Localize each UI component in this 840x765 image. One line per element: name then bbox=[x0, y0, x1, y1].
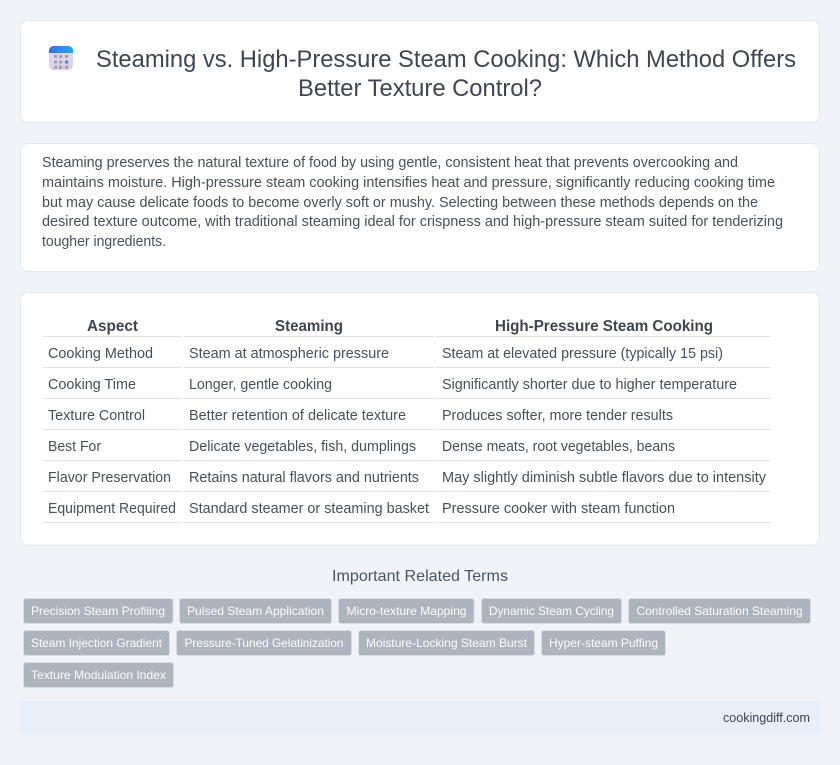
text block: intro: Steaming preserves the natural texture of food by using gentle, consistent heat that prevents overcooking and bbox=[42, 155, 738, 171]
text block: intro: but may cause delicate foods to become overly soft or mushy. Selecting between these methods depends on the bbox=[42, 195, 758, 211]
row: texture control: Better retention of delicate texture bbox=[189, 408, 406, 424]
panel: title header bbox=[20, 20, 820, 122]
panel: comparison table bbox=[20, 292, 820, 546]
title bbox=[96, 46, 796, 102]
footer source text: cookingdiff.com bbox=[723, 710, 810, 725]
tag bbox=[24, 598, 173, 624]
tag: Dynamic Steam Cycling bbox=[489, 604, 614, 618]
tag: Pulsed Steam Application bbox=[187, 604, 324, 618]
icon: calendar bbox=[49, 46, 73, 70]
tag: Micro-texture Mapping bbox=[346, 604, 466, 618]
tag bbox=[358, 630, 534, 656]
row: best for: Dense meats, root vegetables, beans bbox=[442, 439, 675, 455]
row: cooking time: Cooking Time bbox=[48, 377, 136, 393]
tag: Pressure-Tuned Gelatinization bbox=[184, 636, 344, 650]
tag bbox=[482, 598, 622, 624]
row: cooking time: Significantly shorter due to higher temperature bbox=[442, 377, 737, 393]
row: best for: Delicate vegetables, fish, dumplings bbox=[189, 439, 416, 455]
text block: intro bbox=[42, 155, 783, 250]
row: texture control bbox=[48, 408, 673, 424]
row: texture control: Produces softer, more tender results bbox=[442, 408, 673, 424]
panel: intro paragraph bbox=[20, 144, 820, 272]
tag: Precision Steam Profiling bbox=[31, 604, 165, 618]
panel: related term tags bbox=[24, 598, 810, 688]
row: flavor preservation: Flavor Preservation bbox=[48, 470, 171, 486]
table header row: Steaming bbox=[275, 318, 343, 335]
row: equipment required: Equipment Required bbox=[48, 501, 176, 517]
table header row: High-Pressure Steam Cooking bbox=[495, 318, 713, 335]
row: cooking method: Cooking Method bbox=[48, 346, 153, 362]
row: best for bbox=[48, 439, 675, 455]
row: equipment required: Standard steamer or steaming basket bbox=[189, 501, 429, 517]
title: Steaming vs. High-Pressure Steam Cooking: Which Method Offers bbox=[96, 46, 796, 73]
tag bbox=[338, 598, 474, 624]
tag bbox=[24, 662, 174, 688]
row: cooking time: Longer, gentle cooking bbox=[189, 377, 332, 393]
tag: Texture Modulation Index bbox=[31, 668, 166, 682]
row: cooking time bbox=[48, 377, 737, 393]
row: flavor preservation: May slightly diminish subtle flavors due to intensity bbox=[442, 470, 767, 486]
tag bbox=[24, 630, 170, 656]
tag bbox=[628, 598, 810, 624]
row: equipment required: Pressure cooker with steam function bbox=[442, 501, 675, 517]
tag: Hyper-steam Puffing bbox=[549, 636, 658, 650]
tag bbox=[542, 630, 666, 656]
text block: intro: maintains moisture. High-pressure steam cooking intensifies heat and pressure, significantly reducing cooking time bbox=[42, 175, 775, 191]
tag bbox=[176, 630, 352, 656]
row: best for: Best For bbox=[48, 439, 101, 455]
heading: important related terms: Important Related Terms bbox=[332, 568, 508, 585]
table header row: Aspect bbox=[87, 318, 139, 335]
table header row bbox=[87, 318, 713, 335]
row: cooking method: Steam at elevated pressure (typically 15 psi) bbox=[442, 346, 723, 362]
row: flavor preservation bbox=[48, 470, 767, 486]
row: texture control: Texture Control bbox=[48, 408, 145, 424]
text block: intro: tougher ingredients. bbox=[42, 234, 166, 250]
tag: Moisture-Locking Steam Burst bbox=[366, 636, 528, 650]
row: equipment required bbox=[48, 501, 675, 517]
panel: footer bbox=[20, 701, 820, 735]
tag: Controlled Saturation Steaming bbox=[636, 604, 802, 618]
tag: Steam Injection Gradient bbox=[31, 636, 163, 650]
row: flavor preservation: Retains natural flavors and nutrients bbox=[189, 470, 419, 486]
tag bbox=[180, 598, 332, 624]
row: cooking method: Steam at atmospheric pressure bbox=[189, 346, 389, 362]
text block: intro: desired texture outcome, with traditional steaming ideal for crispness and high-pressure steam suited for tenderizing bbox=[42, 214, 783, 230]
title: Better Texture Control? bbox=[298, 75, 542, 102]
row: cooking method bbox=[48, 346, 723, 362]
